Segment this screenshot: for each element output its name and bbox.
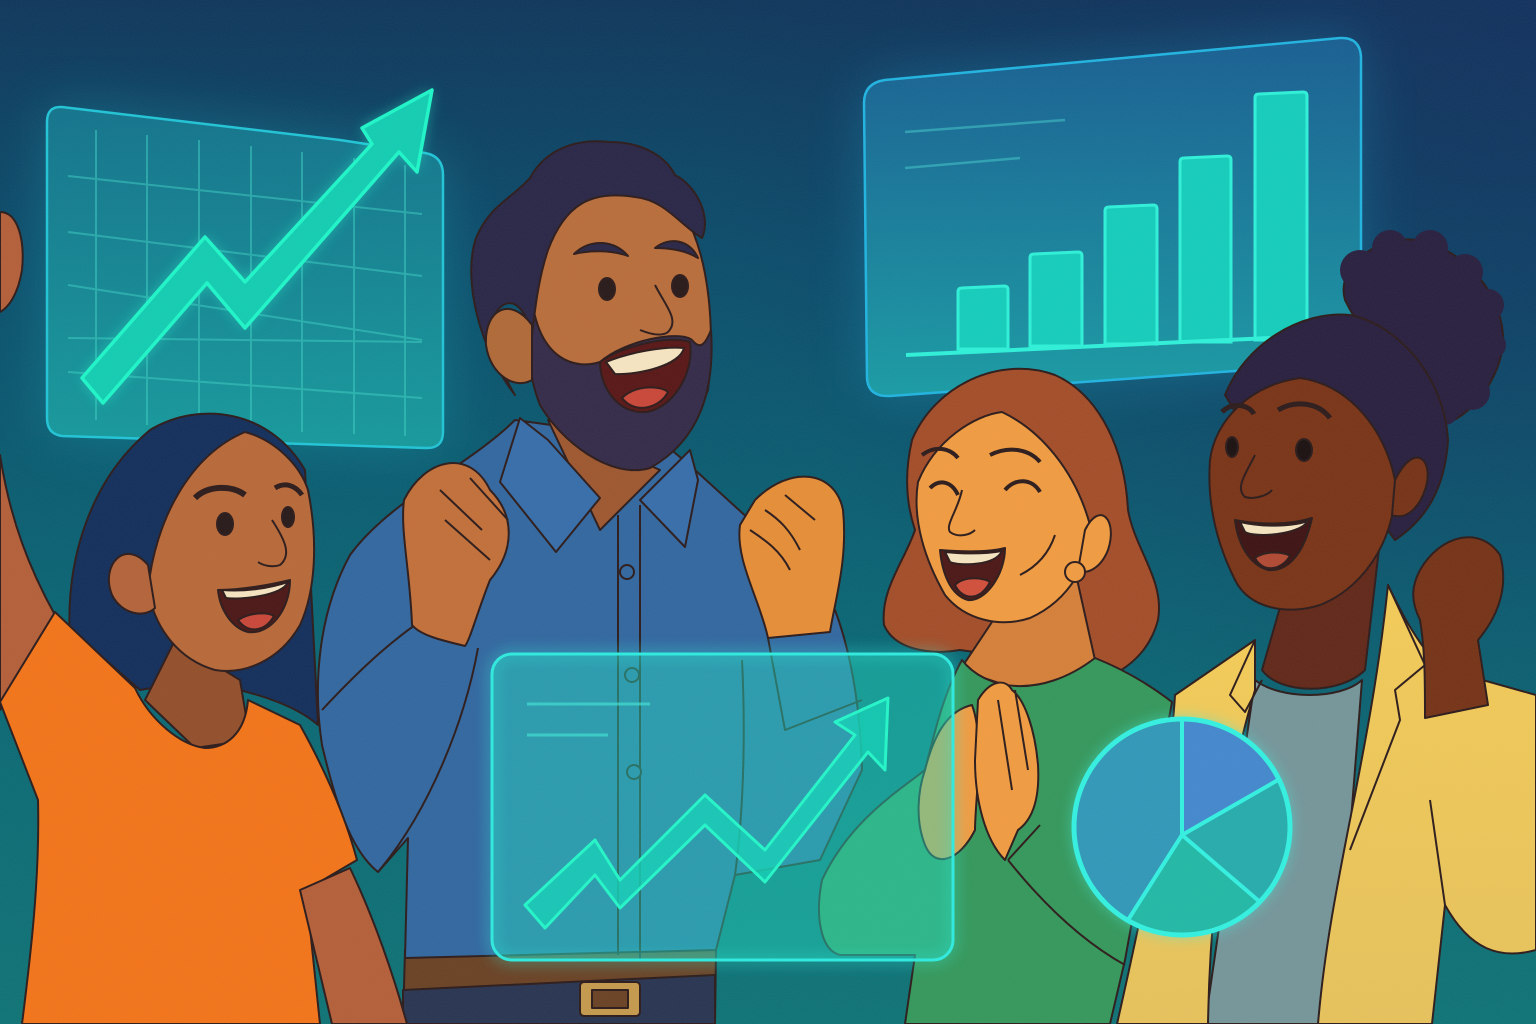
left fist <box>403 463 509 646</box>
mouth <box>940 548 1005 600</box>
grey top <box>1205 680 1362 1024</box>
collar <box>500 418 698 552</box>
ear <box>486 309 532 383</box>
trousers and belt <box>403 950 716 1024</box>
arrow: rising trend top left <box>82 90 432 403</box>
arrow: rising trend <box>525 698 888 928</box>
bun <box>1340 230 1506 425</box>
shirt <box>0 612 357 1024</box>
panel: line chart top left <box>47 107 443 448</box>
person: woman with bun in yellow blazer <box>1117 230 1536 1024</box>
chart: glowing pie <box>1072 717 1292 937</box>
ear and earring <box>1065 515 1111 582</box>
neck <box>1262 540 1380 689</box>
hair <box>884 369 1159 672</box>
ear <box>109 554 155 614</box>
face <box>917 412 1090 622</box>
right fist <box>739 477 844 638</box>
sleeve line <box>1008 825 1125 965</box>
beard <box>529 300 712 470</box>
face <box>1209 378 1395 610</box>
eyes and brows <box>1222 404 1330 498</box>
shirt <box>819 658 1172 1024</box>
panel: glass chart at bottom centre <box>492 654 953 960</box>
right arm <box>300 868 407 1024</box>
buttons <box>620 565 641 779</box>
closed eyes and brows <box>922 449 1055 575</box>
hair <box>471 141 705 395</box>
person: girl in orange shirt <box>0 212 407 1024</box>
panel: bar chart top right <box>864 38 1361 396</box>
slice: blue <box>1182 720 1278 835</box>
neck <box>960 570 1095 700</box>
eyes and brows <box>574 241 698 335</box>
neck <box>548 420 660 530</box>
mouth <box>218 580 290 632</box>
shirt detail lines <box>322 505 862 960</box>
hair back <box>69 414 318 725</box>
text placeholder lines <box>905 120 1065 168</box>
shirt <box>318 420 862 958</box>
head <box>530 194 711 457</box>
eyes and brows <box>195 485 302 566</box>
face <box>148 432 314 671</box>
axis <box>906 338 1270 355</box>
slice: teal bottom <box>1128 835 1260 935</box>
mouth <box>1235 518 1312 570</box>
raised hand <box>1413 537 1503 718</box>
slice: teal right <box>1182 780 1289 902</box>
person: man in blue shirt <box>318 141 862 1024</box>
lapel lines <box>1230 585 1445 905</box>
bars <box>958 92 1307 349</box>
person: laughing woman in green <box>819 369 1172 1024</box>
blazer left <box>1117 640 1255 1024</box>
neck <box>145 640 250 748</box>
text placeholder lines <box>527 704 650 735</box>
raised arm and fist <box>0 212 55 710</box>
hair <box>1225 315 1448 540</box>
mouth <box>600 340 691 412</box>
hands clasped <box>919 683 1038 860</box>
blazer right <box>1318 585 1536 1024</box>
ear <box>1392 458 1428 516</box>
